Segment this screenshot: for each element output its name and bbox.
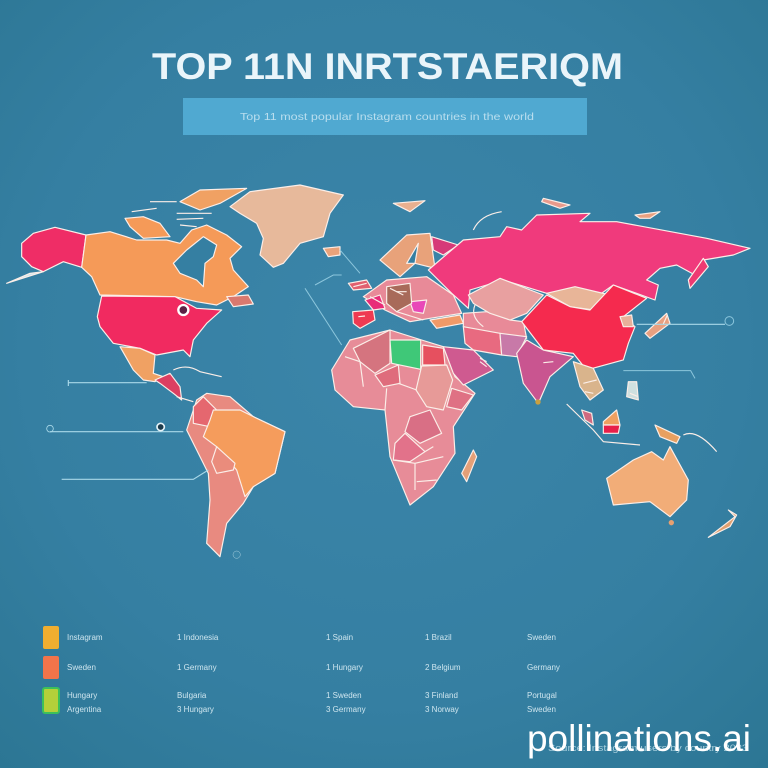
Baltic Sea — [407, 243, 418, 263]
Japan — [645, 313, 670, 338]
Sakhalin and Kamchatka — [688, 258, 708, 288]
subtitle banner — [183, 98, 587, 135]
Central Asia — [463, 312, 527, 338]
Canada — [82, 225, 248, 305]
legend column 4: 1 Brazil — [425, 633, 452, 642]
Korea — [620, 315, 633, 327]
Caspian Sea — [474, 305, 483, 327]
Kola peninsula — [432, 237, 458, 255]
Malaysia — [582, 410, 593, 425]
Panama — [177, 397, 193, 402]
Philippines — [627, 382, 638, 400]
Tasmania — [669, 520, 674, 525]
Alaska — [22, 227, 86, 272]
Iceland — [323, 247, 340, 257]
legend column 2: 3 Hungary — [177, 705, 214, 714]
Colombia — [193, 397, 217, 427]
India — [517, 340, 573, 403]
Congo — [405, 410, 442, 443]
Melanesia arc — [683, 434, 717, 452]
USA — [97, 296, 222, 357]
Africa — [332, 330, 475, 505]
Greenland — [230, 185, 343, 267]
legend column 1: Sweden — [67, 663, 96, 672]
Arctic islands — [125, 217, 170, 238]
legend column 2: Bulgaria — [177, 691, 207, 700]
legend column 5: Portugal — [527, 691, 557, 700]
Ethiopia — [447, 388, 473, 410]
legend swatch: green — [43, 688, 59, 713]
legend column 2: 1 Germany — [177, 663, 217, 672]
legend column 3: 1 Spain — [326, 633, 353, 642]
Aleutian islands — [7, 272, 43, 283]
Balkans — [410, 300, 427, 313]
Australia — [607, 447, 688, 517]
Pakistan — [500, 333, 527, 357]
legend column 5: Sweden — [527, 705, 556, 714]
Arctic stripes — [132, 202, 212, 227]
Arabia — [443, 347, 493, 385]
callout: Central America — [68, 380, 147, 386]
watermark: pollinations.ai — [527, 718, 751, 759]
Afro-Eurasia and Oceania — [332, 198, 750, 537]
Southeast Asia — [573, 362, 603, 400]
New Guinea — [655, 425, 680, 443]
legend column 5 — [527, 633, 560, 714]
callout: Ecuador — [47, 423, 183, 432]
Mongolia — [547, 287, 610, 310]
New Zealand — [708, 510, 737, 537]
legend column 4: 2 Belgium — [425, 663, 461, 672]
Newfoundland — [227, 295, 253, 307]
Chad — [375, 365, 400, 387]
Sumatra and Java arc — [567, 404, 640, 445]
world map — [7, 185, 750, 558]
legend swatch: orange — [43, 656, 59, 679]
callout: Japan — [637, 317, 734, 325]
legend column 3: 1 Hungary — [326, 663, 363, 672]
Angola and Zambia — [393, 433, 425, 462]
subtitle banner: Top 11 most popular Instagram countries in the world — [240, 111, 534, 123]
Algeria — [353, 330, 390, 373]
legend column 4 — [425, 633, 461, 714]
Severnaya Zemlya — [635, 212, 660, 218]
callout: Philippines — [623, 371, 695, 378]
UK — [348, 280, 372, 290]
Cuba — [173, 367, 222, 377]
Russia — [428, 213, 750, 308]
Great Lakes — [178, 305, 188, 315]
legend column 1: Argentina — [67, 705, 102, 714]
Brazil — [203, 410, 285, 497]
Mexico — [120, 347, 163, 382]
callout: Atlantic — [305, 250, 360, 345]
Bolivia — [212, 447, 235, 473]
Borneo — [603, 410, 620, 425]
Small light details — [353, 283, 638, 397]
South America — [187, 393, 285, 557]
legend column 3: 3 Germany — [326, 705, 366, 714]
legend column 1: Hungary — [67, 691, 97, 700]
Madagascar — [462, 450, 477, 482]
Eastern Europe — [363, 277, 462, 322]
Small dark details — [358, 292, 667, 393]
legend column 5: Germany — [527, 663, 560, 672]
Hudson Bay — [173, 237, 217, 287]
Ellesmere island — [180, 188, 247, 210]
Sudan — [416, 365, 453, 410]
Spain — [353, 310, 375, 328]
Turkey — [430, 315, 463, 328]
France — [365, 295, 385, 310]
legend — [43, 626, 560, 714]
callout lines — [47, 250, 734, 479]
legend column 3: 1 Sweden — [326, 691, 362, 700]
Libya — [390, 340, 421, 369]
legend swatch: yellow — [43, 626, 59, 649]
Scandinavia and Finland — [380, 233, 435, 277]
legend column 1 — [67, 633, 103, 714]
Americas — [7, 185, 343, 558]
Franz Josef Land — [393, 201, 425, 212]
Indonesia red — [603, 425, 620, 433]
title: TOP 11N INRTSTAERIQM — [152, 46, 623, 87]
Kazakhstan — [468, 278, 543, 320]
legend column 2 — [177, 633, 219, 714]
Arctic Russian islands — [542, 198, 570, 208]
Central America — [155, 373, 182, 400]
African borders — [345, 357, 443, 490]
callout: Chile — [62, 470, 208, 479]
legend column 5: Sweden — [527, 633, 556, 642]
China — [522, 285, 647, 370]
legend column 2: 1 Indonesia — [177, 633, 219, 642]
faint footer text: Source: Instagram users by country 2023 — [548, 743, 748, 753]
legend column 4: 3 Finland — [425, 691, 458, 700]
Iran and Iraq — [463, 327, 502, 355]
Tierra del Fuego — [233, 551, 240, 558]
Central Europe mosaic — [387, 283, 412, 312]
legend column 4: 3 Norway — [425, 705, 459, 714]
Novaya Zemlya — [473, 212, 502, 230]
Sri Lanka — [535, 399, 541, 405]
legend column 1: Instagram — [67, 633, 103, 642]
legend column 3 — [326, 633, 366, 714]
Egypt — [423, 345, 445, 365]
